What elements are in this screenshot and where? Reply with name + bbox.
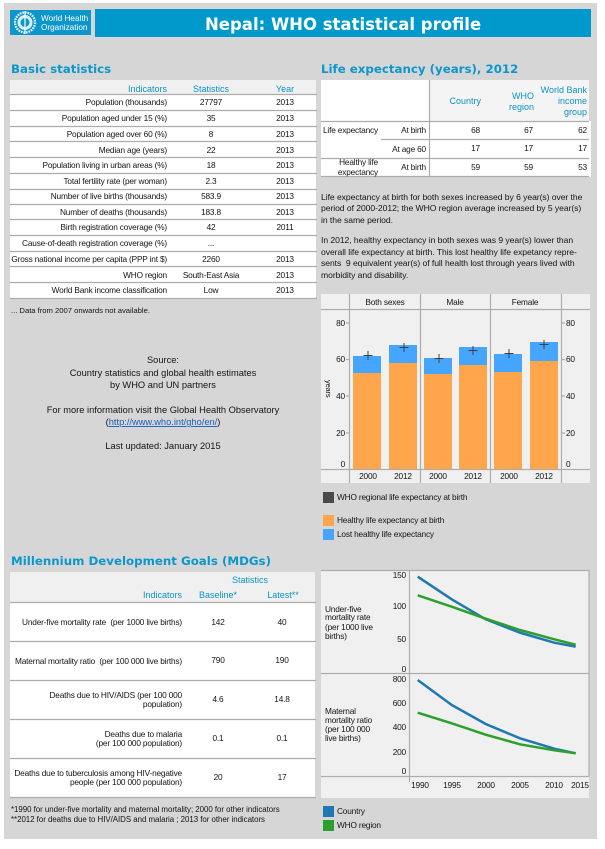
table rows: 0.1 — [212, 733, 224, 743]
table rows: 2011 — [276, 222, 294, 232]
text block: source: Source: — [147, 355, 179, 365]
table rows: 2013 — [276, 254, 294, 264]
table header — [143, 575, 299, 600]
table rows: 53 — [578, 162, 588, 172]
x axis labels: 2012 — [464, 471, 482, 481]
text block: life expectancy commentary: period of 2000-2012; the WHO region average increased by 5 year(s) — [321, 203, 581, 213]
right y axis: 60 — [566, 354, 575, 364]
chart: maternal mortality ratio: 600 — [393, 698, 407, 708]
table rows: Number of deaths (thousands) — [60, 207, 167, 217]
title banner — [95, 9, 591, 37]
table rows: Life expectancy — [323, 125, 379, 135]
table header: region — [509, 102, 534, 112]
heading: Life expectancy: Life expectancy (years), 2012 — [321, 62, 518, 76]
table header: Indicators — [143, 590, 182, 600]
table header: Baseline* — [199, 590, 238, 600]
table rows: 27797 — [200, 97, 223, 107]
table rows: expectancy — [338, 167, 379, 177]
x axis labels: 2005 — [511, 780, 529, 790]
text block: life expectancy commentary: overall life expectancy at birth. This lost healthy life expetancy repre- — [321, 247, 577, 257]
logo: World Health Organization — [10, 10, 91, 35]
panel: life expectancy table — [321, 80, 591, 177]
chart: under-five mortality rate: mortality rate — [325, 612, 371, 622]
line charts: mortality trends — [321, 570, 589, 798]
table rows: 22 — [207, 145, 216, 155]
chart: maternal mortality ratio: 400 — [393, 722, 407, 732]
table rows: 2013 — [276, 113, 294, 123]
table rows: 4.6 — [212, 694, 224, 704]
right y axis: 20 — [566, 428, 575, 438]
chart: maternal mortality ratio: 0 — [402, 766, 407, 776]
x axis labels: 2000 — [429, 471, 447, 481]
table rows: 42 — [207, 222, 216, 232]
x axis labels: 1990 — [411, 780, 429, 790]
table header: World Bank — [541, 85, 587, 95]
table rows: Population aged over 60 (%) — [67, 129, 167, 139]
table rows: Deaths due to HIV/AIDS (per 100 000 — [49, 690, 183, 700]
table header: Country — [449, 96, 481, 106]
table rows: 2260 — [202, 254, 220, 264]
table rows: At birth — [401, 125, 427, 135]
table rows: 2013 — [276, 270, 294, 280]
table rows: 67 — [524, 125, 534, 135]
chart: under-five mortality rate: Under-five — [325, 604, 362, 614]
table rows: Under-five mortality rate (per 1000 live births) — [22, 617, 182, 627]
text block: source: by WHO and UN partners — [110, 380, 216, 390]
text block: source: Country statistics and global health estimates — [70, 368, 257, 378]
table rows: At age 60 — [392, 144, 427, 154]
x axis labels: 2015 — [571, 780, 589, 790]
table header: Statistics — [232, 575, 269, 585]
table rows: ... — [208, 238, 214, 248]
table rows: Number of live births (thousands) — [51, 191, 167, 201]
chart: maternal mortality ratio — [325, 674, 576, 776]
bar chart: life expectancy — [321, 294, 590, 483]
table rows: 2013 — [276, 129, 294, 139]
table rows: 142 — [211, 617, 225, 627]
legend: mortality trends — [323, 806, 381, 831]
table rows — [323, 125, 588, 177]
table rows: 0.1 — [276, 733, 288, 743]
heading: MDGs: Millennium Development Goals (MDGs) — [11, 554, 271, 568]
chart: maternal mortality ratio: mortality ratio — [325, 715, 373, 725]
chart: under-five mortality rate: births) — [325, 631, 347, 641]
panel: MDG table — [10, 572, 316, 798]
chart group labels — [365, 297, 539, 307]
chart: under-five mortality rate: 0 — [402, 664, 407, 674]
table header: group — [564, 107, 587, 117]
lost healthy life expectancy bars — [353, 342, 558, 374]
table rows: Birth registration coverage (%) — [61, 222, 167, 232]
table rows: 2013 — [276, 145, 294, 155]
chart: maternal mortality ratio: Maternal — [325, 706, 356, 716]
note: data availability: ... Data from 2007 onwards not available. — [11, 306, 150, 315]
table rows: 17 — [278, 772, 287, 782]
footnotes: MDG table — [11, 805, 280, 824]
table rows: 583.9 — [201, 191, 221, 201]
table rows: 8 — [209, 129, 214, 139]
x axis labels: 1995 — [443, 780, 461, 790]
left y axis: 20 — [336, 428, 346, 438]
left y axis: 60 — [336, 354, 346, 364]
table rows: 20 — [214, 772, 223, 782]
icon: WHO emblem — [15, 11, 35, 34]
table rows: Healthy life — [339, 157, 379, 167]
logo: World Health Organization: Organization — [41, 23, 88, 32]
x axis labels: 2000 — [359, 471, 377, 481]
table rows: Deaths due to malaria — [105, 729, 183, 739]
table rows: WHO region — [123, 270, 168, 280]
panel: basic statistics table — [10, 80, 317, 298]
text block: source — [47, 355, 280, 451]
x axis labels — [411, 780, 589, 790]
table rows: 18 — [207, 160, 216, 170]
right y axis: 0 — [566, 459, 571, 469]
table rows: 183.8 — [201, 207, 221, 217]
text block: life expectancy commentary: Life expectancy at birth for both sexes increased by 6 year(s) over the — [321, 192, 583, 202]
legend: mortality trends: Country — [337, 806, 366, 816]
table rows: World Bank income classification — [52, 285, 168, 295]
table rows: 2013 — [276, 191, 294, 201]
right y axis — [566, 318, 575, 469]
table header: WHO — [512, 91, 534, 101]
text block: life expectancy commentary: sents 9 equivalent year(s) of full health lost through years lived with — [321, 258, 575, 268]
table rows: At birth — [401, 162, 427, 172]
chart group labels: Female — [512, 297, 539, 307]
table rows — [11, 97, 294, 295]
x axis labels: 2010 — [545, 780, 563, 790]
text block: source: Last updated: January 2015 — [105, 441, 221, 451]
table rows: Population living in urban areas (%) — [42, 160, 167, 170]
footnotes: MDG table: **2012 for deaths due to HIV/AIDS and malaria ; 2013 for other indicators — [11, 815, 265, 824]
chart: under-five mortality rate: 50 — [397, 634, 407, 644]
table rows: Median age (years) — [99, 145, 167, 155]
chart: under-five mortality rate: 100 — [393, 601, 407, 611]
table rows: Population (thousands) — [86, 97, 167, 107]
table rows: 59 — [471, 162, 481, 172]
table rows: Population aged under 15 (%) — [62, 113, 167, 123]
heading: Basic statistics: Basic statistics — [11, 62, 111, 76]
table rows: 2013 — [276, 97, 294, 107]
table rows: Cause-of-death registration coverage (%) — [22, 238, 167, 248]
table rows: 14.8 — [274, 694, 290, 704]
table rows: 40 — [278, 617, 287, 627]
table rows: 2.3 — [206, 176, 217, 186]
table rows: 2013 — [276, 285, 294, 295]
x axis labels: 2000 — [477, 780, 495, 790]
table header: Indicators — [128, 84, 167, 94]
table header: income — [558, 96, 587, 106]
healthy life expectancy bars — [353, 361, 558, 469]
text block: life expectancy commentary: In 2012, healthy expectancy in both sexes was 9 year(s) lower than — [321, 235, 573, 245]
table rows: 35 — [207, 113, 216, 123]
left y axis: years — [324, 380, 333, 398]
table header: Year — [276, 84, 294, 94]
legend: mortality trends: WHO region — [337, 820, 381, 830]
table rows: South-East Asia — [183, 270, 240, 280]
table rows — [14, 617, 290, 787]
WHO regional markers — [364, 340, 548, 363]
table header — [449, 85, 587, 117]
right y axis: 40 — [566, 391, 575, 401]
legend: life expectancy: WHO regional life expectancy at birth — [337, 492, 468, 502]
table rows: Total fertility rate (per woman) — [63, 176, 167, 186]
table rows: 17 — [471, 143, 481, 153]
table header: Statistics — [193, 84, 230, 94]
left y axis: 80 — [336, 318, 346, 328]
table rows: (per 100 000 population) — [96, 738, 182, 748]
table rows: 2013 — [276, 207, 294, 217]
text block: life expectancy commentary — [321, 192, 583, 280]
left y axis: 0 — [341, 459, 346, 469]
logo: World Health Organization: World Health — [41, 14, 89, 23]
table header — [128, 84, 294, 94]
legend: life expectancy — [323, 492, 468, 540]
title banner: Nepal: WHO statistical profile — [205, 15, 481, 34]
table rows: 17 — [524, 143, 534, 153]
text block: source: (http://www.who.int/gho/en/) — [106, 417, 220, 427]
table rows: Maternal mortality ratio (per 100 000 live births) — [15, 656, 182, 666]
chart: maternal mortality ratio: 200 — [393, 747, 407, 757]
left y axis: 40 — [336, 391, 346, 401]
chart: under-five mortality rate — [325, 570, 576, 674]
table rows: 59 — [524, 162, 534, 172]
table rows: 2013 — [276, 176, 294, 186]
text block: life expectancy commentary: in the same period. — [321, 215, 393, 225]
chart: maternal mortality ratio: live births) — [325, 733, 361, 743]
text block: source: For more information visit the Global Health Observatory — [47, 405, 280, 415]
chart group labels: Both sexes — [365, 297, 405, 307]
chart: under-five mortality rate: (per 1000 live — [325, 622, 373, 632]
table rows: 68 — [471, 125, 481, 135]
chart: under-five mortality rate: 150 — [393, 570, 407, 580]
chart: maternal mortality ratio: 800 — [393, 674, 407, 684]
footnotes: MDG table: *1990 for under-five mortality and maternal mortality; 2000 for other indicators — [11, 805, 280, 814]
x axis labels: 2012 — [535, 471, 553, 481]
table rows: Gross national income per capita (PPP int $) — [11, 254, 167, 264]
table rows: Low — [204, 285, 220, 295]
left y axis — [324, 318, 346, 469]
table rows: 62 — [578, 125, 588, 135]
legend: life expectancy: Lost healthy life expectancy — [337, 529, 435, 539]
x axis labels — [359, 471, 553, 481]
chart group labels: Male — [446, 297, 464, 307]
table rows: 17 — [578, 143, 588, 153]
table rows: people (per 100 000 population) — [70, 777, 182, 787]
x axis labels: 2012 — [394, 471, 412, 481]
chart: maternal mortality ratio: (per 100 000 — [325, 724, 370, 734]
table header: Latest** — [267, 590, 299, 600]
text block: life expectancy commentary: morbidity and disability. — [321, 270, 408, 280]
table rows: population) — [143, 699, 182, 709]
x axis labels: 2000 — [500, 471, 518, 481]
table rows: 190 — [275, 655, 289, 665]
table rows: Deaths due to tuberculosis among HIV-negative — [14, 768, 183, 778]
legend: life expectancy: Healthy life expectancy at birth — [337, 515, 445, 525]
right y axis: 80 — [566, 318, 575, 328]
table rows: 2013 — [276, 160, 294, 170]
table rows: 790 — [211, 655, 225, 665]
